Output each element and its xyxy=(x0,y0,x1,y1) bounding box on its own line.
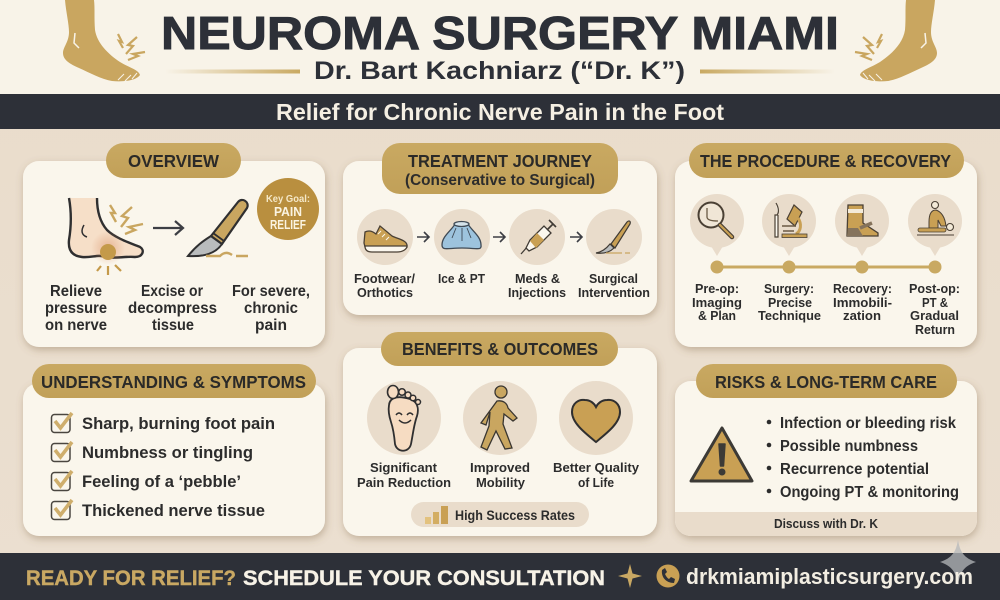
heading: benefits and outcomes xyxy=(381,332,618,366)
icon: warning triangle xyxy=(691,428,752,481)
discuss strip xyxy=(675,512,977,536)
panel: understanding and symptoms xyxy=(23,364,325,536)
step: post-op xyxy=(908,194,962,337)
symptom: numbness: Numbness or tingling xyxy=(82,443,253,462)
step: footwear xyxy=(354,209,415,300)
text: for severe pain: chronic xyxy=(244,300,298,317)
step: meds and injections: Meds & xyxy=(515,271,560,286)
icon: left foot with pain xyxy=(63,0,145,81)
symptom: burning pain: Sharp, burning foot pain xyxy=(82,414,275,433)
step: surgical intervention: Surgical xyxy=(589,271,638,286)
step: surgical intervention: Intervention xyxy=(578,285,650,300)
icon: star xyxy=(618,564,642,588)
step: surgery: Precise xyxy=(768,295,812,310)
heading: treatment journey: TREATMENT JOURNEY xyxy=(408,151,592,171)
icon: painful foot xyxy=(69,198,143,275)
step: pre-op: Pre-op: xyxy=(695,281,739,296)
risk list: Possible numbness xyxy=(780,438,918,455)
heading: understanding and symptoms: UNDERSTANDING & SYMPTOMS xyxy=(41,372,306,392)
icon: sparkle xyxy=(940,540,976,585)
step: post-op: Return xyxy=(915,322,955,337)
badge: high success rates: High Success Rates xyxy=(455,508,575,523)
arrow xyxy=(493,232,505,242)
heading: treatment journey: (Conservative to Surgical) xyxy=(405,172,595,189)
arrow xyxy=(417,232,429,242)
benefit: quality of life xyxy=(553,381,640,490)
step: surgery: Surgery: xyxy=(764,281,814,296)
icon: right foot with pain xyxy=(855,0,937,81)
header xyxy=(0,0,1000,94)
benefit: pain reduction: Pain Reduction xyxy=(357,475,451,490)
step: recovery xyxy=(833,194,892,323)
cta text: SCHEDULE YOUR CONSULTATION xyxy=(243,566,605,590)
benefit: quality of life: Better Quality xyxy=(553,460,640,475)
step: pre-op: & Plan xyxy=(698,308,736,323)
text: relieve pressure: Relieve xyxy=(50,283,102,300)
step: recovery: Recovery: xyxy=(833,281,892,296)
text: excise or decompress: decompress xyxy=(128,300,217,317)
discuss strip: Discuss with Dr. K xyxy=(774,517,878,531)
step: post-op: Post-op: xyxy=(909,281,960,296)
heading: overview: OVERVIEW xyxy=(128,151,219,171)
website: drkmiamiplasticsurgery.com xyxy=(686,564,973,589)
icon: scalpel xyxy=(188,200,248,256)
benefit: improved mobility: Improved xyxy=(470,460,530,475)
badge: key goal: RELIEF xyxy=(270,218,306,232)
cta text: READY FOR RELIEF? xyxy=(26,566,236,590)
text: relieve pressure xyxy=(45,283,107,334)
step: recovery: zation xyxy=(843,308,881,323)
benefit: pain reduction xyxy=(357,381,451,490)
arrow xyxy=(570,232,582,242)
badge: high success rates xyxy=(411,502,589,527)
step: ice and PT xyxy=(434,209,490,286)
step: meds and injections: Injections xyxy=(508,285,566,300)
step: post-op: Gradual xyxy=(910,308,959,323)
title: NEUROMA SURGERY MIAMI xyxy=(161,7,839,59)
heading: understanding and symptoms xyxy=(32,364,316,398)
risk list xyxy=(767,415,959,501)
heading: procedure and recovery: THE PROCEDURE & RECOVERY xyxy=(700,151,951,171)
icon: phone xyxy=(656,564,680,588)
text: excise or decompress: tissue xyxy=(152,317,194,334)
text: excise or decompress xyxy=(128,283,217,334)
subtitle: Dr. Bart Kachniarz (“Dr. K”) xyxy=(314,57,685,85)
panel: procedure and recovery xyxy=(675,143,977,347)
step: surgical intervention xyxy=(578,209,650,300)
benefit: quality of life: of Life xyxy=(578,475,614,490)
risk list: Infection or bleeding risk xyxy=(780,415,956,432)
cta text xyxy=(26,566,605,590)
step: footwear: Orthotics xyxy=(357,285,413,300)
step: pre-op: Imaging xyxy=(692,295,742,310)
step: recovery: Immobili- xyxy=(833,295,892,310)
symptom: thickened tissue: Thickened nerve tissue xyxy=(82,501,265,520)
benefit: improved mobility xyxy=(463,381,537,490)
step: surgery xyxy=(758,194,821,323)
footer call to action xyxy=(0,540,1000,600)
badge: key goal: Key Goal: xyxy=(266,193,310,205)
step: pre-op xyxy=(690,194,744,323)
text: for severe pain: For severe, xyxy=(232,283,310,300)
benefit: improved mobility: Mobility xyxy=(476,475,526,490)
text: excise or decompress: Excise or xyxy=(141,283,203,300)
symptom: pebble: Feeling of a ‘pebble’ xyxy=(82,472,241,491)
benefit: pain reduction: Significant xyxy=(370,460,438,475)
heading: procedure and recovery xyxy=(689,143,964,178)
timeline xyxy=(710,260,942,274)
tagline band xyxy=(0,94,1000,129)
badge: key goal: PAIN xyxy=(274,205,302,219)
step: surgery: Technique xyxy=(758,308,821,323)
heading: risks and long-term care: RISKS & LONG-TERM CARE xyxy=(715,372,937,392)
tagline band: Relief for Chronic Nerve Pain in the Foot xyxy=(276,99,724,125)
panel: overview xyxy=(23,143,325,347)
panel: risks and long-term care xyxy=(675,364,977,536)
step: meds and injections xyxy=(508,209,566,300)
heading: overview xyxy=(106,143,241,178)
panel: benefits and outcomes xyxy=(343,332,657,536)
heading: treatment journey xyxy=(382,143,618,194)
step: post-op: PT & xyxy=(922,295,948,310)
badge: key goal xyxy=(257,178,319,240)
step: ice and PT: Ice & PT xyxy=(438,271,485,286)
panel: treatment journey xyxy=(343,143,657,315)
risk list: Ongoing PT & monitoring xyxy=(780,484,959,501)
text: for severe pain xyxy=(232,283,310,334)
heading: benefits and outcomes: BENEFITS & OUTCOMES xyxy=(402,339,598,359)
text: relieve pressure: on nerve xyxy=(45,317,107,334)
step: footwear: Footwear/ xyxy=(354,271,415,286)
risk list: Recurrence potential xyxy=(780,461,929,478)
heading: risks and long-term care xyxy=(696,364,957,398)
arrow xyxy=(153,221,183,235)
text: relieve pressure: pressure xyxy=(45,300,107,317)
text: for severe pain: pain xyxy=(255,317,287,334)
